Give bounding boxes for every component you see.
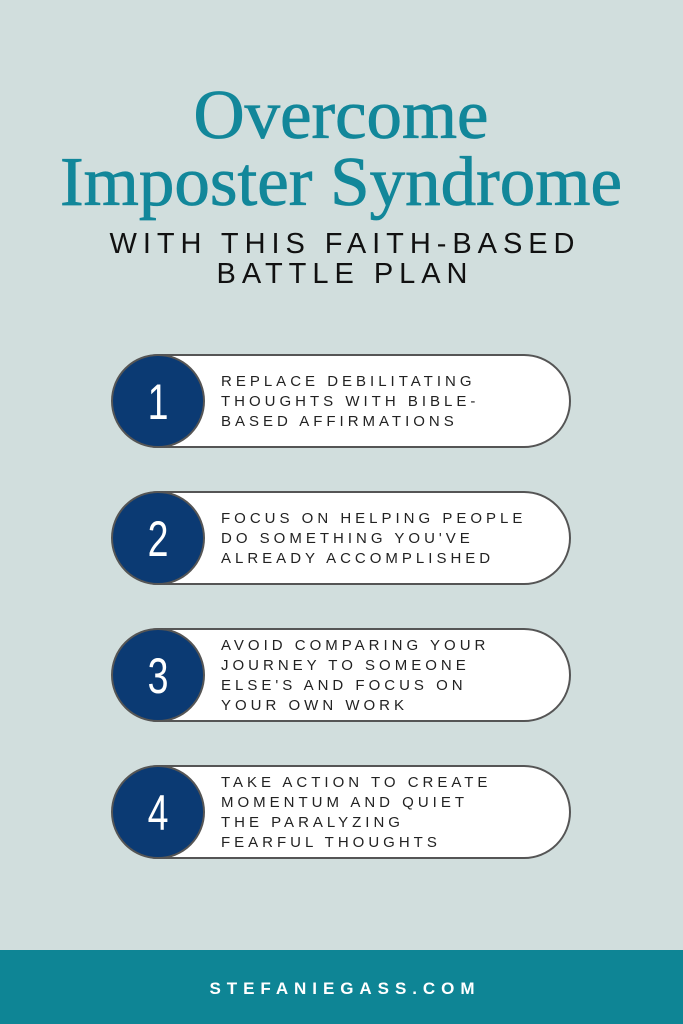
step 1: BASED AFFIRMATIONS bbox=[221, 413, 458, 430]
subtitle bbox=[110, 228, 574, 290]
footer: STEFANIEGASS.COM bbox=[210, 979, 474, 998]
step 1: THOUGHTS WITH BIBLE- bbox=[221, 393, 479, 410]
step 3: 3 bbox=[148, 649, 168, 704]
step 2: ALREADY ACCOMPLISHED bbox=[221, 550, 494, 567]
subtitle: WITH THIS FAITH-BASED bbox=[110, 228, 574, 260]
step 1: REPLACE DEBILITATING bbox=[221, 373, 476, 390]
step 2: FOCUS ON HELPING PEOPLE bbox=[221, 510, 526, 527]
step 3: AVOID COMPARING YOUR bbox=[221, 637, 489, 654]
step 4: 4 bbox=[148, 786, 168, 841]
step 3: JOURNEY TO SOMEONE bbox=[221, 657, 470, 674]
step 4: THE PARALYZING bbox=[221, 814, 404, 831]
step 3: YOUR OWN WORK bbox=[221, 697, 408, 714]
step 4: MOMENTUM AND QUIET bbox=[221, 794, 468, 811]
step 3: ELSE'S AND FOCUS ON bbox=[221, 677, 467, 694]
subtitle: BATTLE PLAN bbox=[216, 258, 468, 290]
title bbox=[60, 77, 622, 221]
step 2 bbox=[112, 492, 570, 584]
step 4 bbox=[112, 766, 570, 858]
title: Imposter Syndrome bbox=[60, 144, 622, 221]
step 4: TAKE ACTION TO CREATE bbox=[221, 774, 491, 791]
step 1 bbox=[112, 355, 570, 447]
step 2: DO SOMETHING YOU'VE bbox=[221, 530, 474, 547]
step 4: FEARFUL THOUGHTS bbox=[221, 834, 441, 851]
step 3 bbox=[112, 629, 570, 721]
step 2: 2 bbox=[148, 512, 168, 567]
title: Overcome bbox=[194, 77, 488, 154]
footer bbox=[0, 950, 683, 1024]
step 1: 1 bbox=[148, 375, 168, 430]
